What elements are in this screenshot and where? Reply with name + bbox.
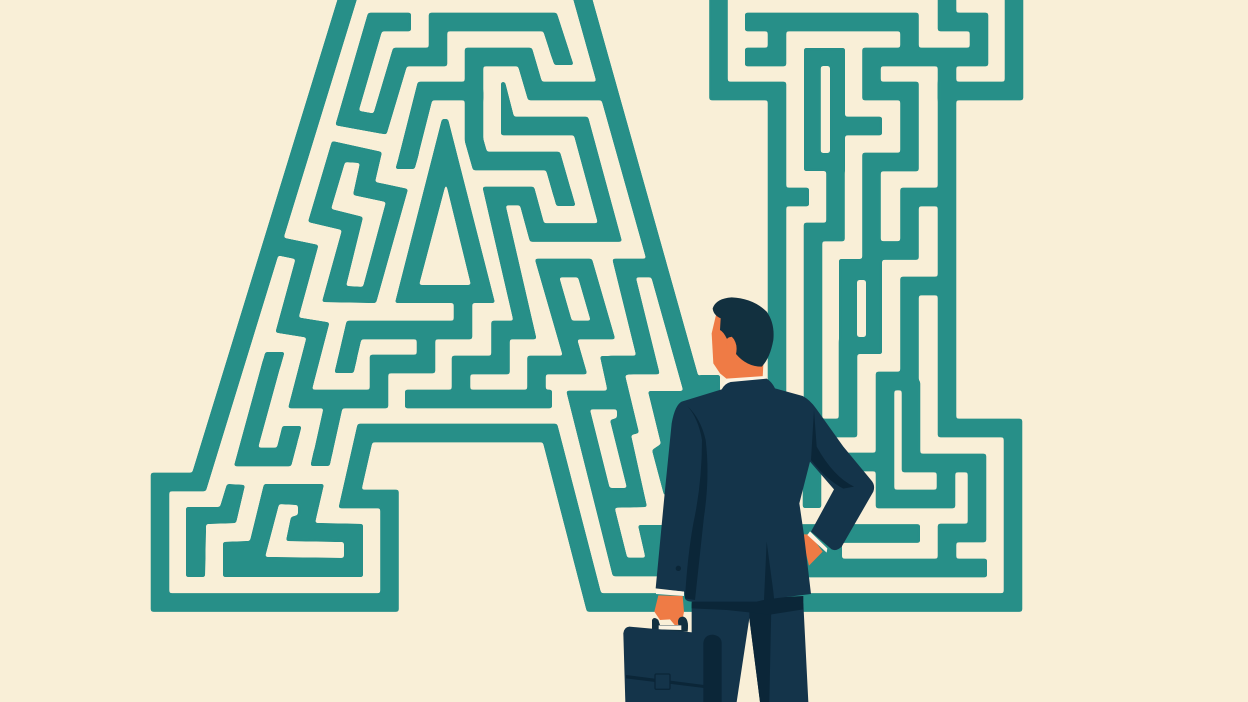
inner leg shade [749, 607, 771, 702]
A right leg lower piece [638, 525, 675, 560]
outer outline of letters A and I [160, 0, 1014, 602]
hair [713, 297, 774, 367]
briefcase [623, 617, 722, 702]
flat wall end left hairpin [261, 352, 285, 368]
left hand [654, 595, 684, 625]
flat wall end hairpin return [279, 426, 302, 440]
businessman [623, 297, 874, 702]
central triangle [395, 119, 495, 303]
I left serif and stem [718, 0, 777, 440]
back vent [764, 542, 774, 600]
flat wall end top hairpin [549, 50, 574, 65]
right cuff [807, 531, 827, 553]
A right diagonal [576, 0, 694, 395]
right leg [747, 603, 808, 702]
handle [652, 617, 688, 632]
bottom-left block [223, 484, 363, 577]
right hand [803, 534, 823, 566]
arm crease [811, 410, 854, 489]
A maze wall right stair [610, 268, 662, 365]
A maze wall bottom row [405, 390, 552, 408]
I short centre branch [845, 117, 882, 135]
A maze wall stem under triangle [346, 303, 463, 362]
sleeve button [676, 566, 681, 571]
I hidden connector column [803, 460, 821, 508]
handle gap [659, 625, 681, 630]
A maze wall left hairpin [246, 362, 289, 457]
I lower right wall [885, 286, 947, 499]
A maze wall top hairpin [347, 22, 561, 124]
ear [726, 337, 735, 355]
flat wall end stub [310, 450, 333, 466]
bottom-left wall [186, 484, 245, 577]
filled maze pieces [186, 48, 882, 577]
A maze wall stub [323, 399, 335, 453]
left cuff [656, 589, 684, 596]
I hidden connector row [840, 453, 885, 471]
I bottom row lower [800, 559, 987, 577]
I slotted block top [804, 48, 845, 171]
case end panel [703, 635, 722, 702]
I bottom row upper [800, 524, 920, 543]
head skin [712, 315, 763, 379]
lightning shape wall [308, 141, 408, 303]
clasp [655, 674, 670, 689]
I inner branch [872, 197, 947, 250]
case body [623, 627, 704, 702]
A maze wall right leg [578, 400, 680, 567]
stroked maze walls [160, 0, 1014, 602]
A maze wall centre top [408, 57, 606, 160]
sleeve seam shade [685, 406, 707, 600]
A maze wall long switchback [461, 126, 610, 399]
A maze wall looped block [536, 268, 603, 399]
I stem stub [777, 188, 809, 206]
I slotted block lower [839, 259, 882, 380]
strap [626, 675, 704, 688]
collar [723, 376, 767, 386]
I top left comb [745, 22, 777, 57]
waist shadow [692, 596, 803, 615]
jacket [656, 379, 874, 602]
left leg [692, 603, 753, 702]
A right leg zigzag wall [600, 356, 647, 508]
flat wall end centre branch [552, 190, 576, 206]
I lower centre wall [813, 160, 848, 428]
A right leg fill behind man [648, 375, 720, 495]
flat wall end stem [334, 358, 357, 373]
small arrow tip [501, 82, 514, 135]
A maze wall centre branch [474, 91, 562, 194]
AI maze lettering [160, 0, 1014, 602]
I top row [745, 22, 910, 57]
I right top corner walls [872, 0, 979, 262]
I connector behind hand [800, 525, 842, 577]
I lower right spiral [911, 381, 977, 568]
A maze wall stair left [273, 245, 426, 399]
flat wall end centre top [395, 153, 419, 169]
I right stem [938, 57, 956, 100]
